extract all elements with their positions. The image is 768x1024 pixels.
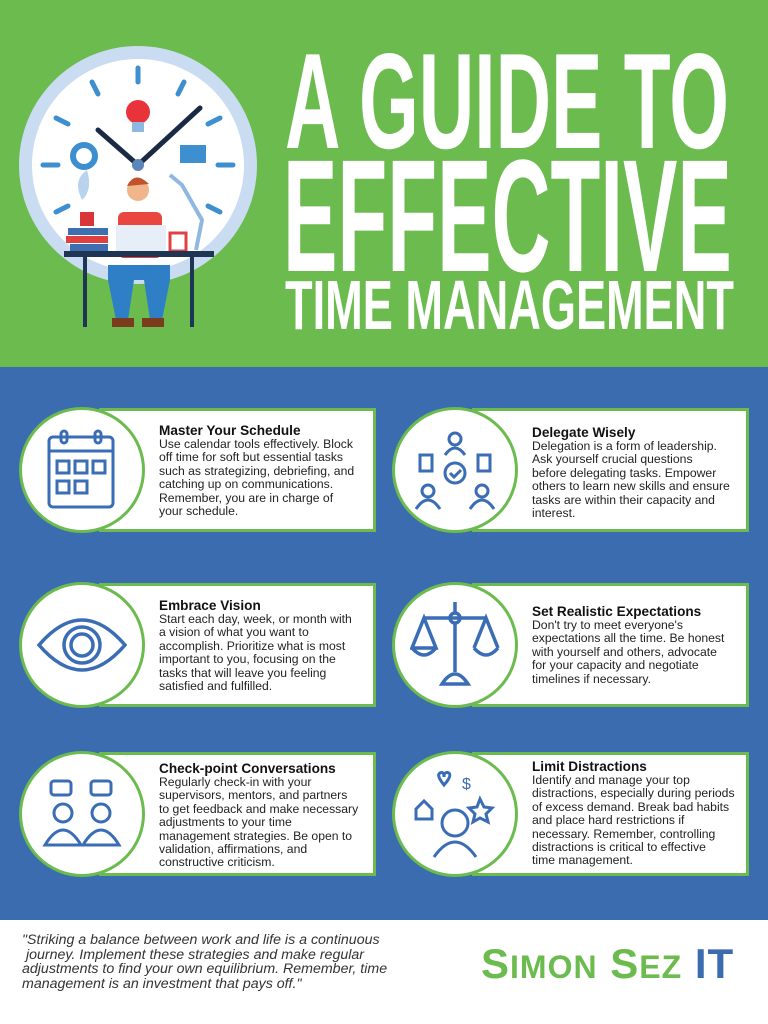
card: Check-point Conversations: Regularly check-in with your xyxy=(159,775,311,789)
card: Limit Distractions xyxy=(392,751,749,877)
card: Set Realistic Expectations: timelines if necessary. xyxy=(532,672,651,686)
card: Set Realistic Expectations: Don't try to meet everyone's xyxy=(532,618,683,632)
card: Check-point Conversations xyxy=(19,751,376,877)
card: Master Your Schedule: Remember, you are in charge of xyxy=(159,491,333,505)
illustration: clock with person at desk xyxy=(19,46,257,327)
card: Limit Distractions: Limit Distractions xyxy=(532,759,647,774)
card: Set Realistic Expectations: for your capacity and negotiate xyxy=(532,658,699,672)
card: Limit Distractions: Identify and manage your top xyxy=(532,773,690,787)
card: Delegate Wisely: interest. xyxy=(532,506,575,520)
card: Limit Distractions: time management. xyxy=(532,853,633,867)
card: Limit Distractions: of excess demand. Break bad habits xyxy=(532,800,729,814)
logo: SIMON SEZ IT xyxy=(481,940,734,987)
card: Check-point Conversations: management strategies. Be open to xyxy=(159,829,352,843)
card: Master Your Schedule: Use calendar tools effectively. Block xyxy=(159,437,353,451)
footer quote xyxy=(22,932,387,992)
card: Limit Distractions: distractions is critical to effective xyxy=(532,840,706,854)
blue section xyxy=(0,367,768,920)
card: Master Your Schedule: Master Your Schedule xyxy=(159,423,301,438)
card: Limit Distractions: distractions, especially during periods xyxy=(532,786,735,800)
icon: distracted person xyxy=(414,771,496,858)
card: Master Your Schedule: off time for soft but essential tasks xyxy=(159,450,343,464)
card: Check-point Conversations: constructive criticism. xyxy=(159,855,275,869)
card: Master Your Schedule: your schedule. xyxy=(159,504,238,518)
card: Embrace Vision: tasks that will leave you feeling xyxy=(159,666,326,680)
icon: delegation xyxy=(414,432,496,510)
icon: two people talking xyxy=(42,780,122,846)
text: A GUIDE TO xyxy=(285,25,729,177)
card: Limit Distractions: and place hard restrictions if xyxy=(532,813,684,827)
footer quote: journey. Implement these strategies and make regular xyxy=(26,947,364,963)
card: Delegate Wisely: Ask yourself crucial questions xyxy=(532,452,693,466)
icon: scales xyxy=(410,602,500,686)
text: TIME MANAGEMENT xyxy=(285,266,734,344)
footer quote: "Striking a balance between work and life is a continuous xyxy=(22,932,380,948)
footer quote: adjustments to find your own equilibrium. Remember, time xyxy=(22,961,387,977)
icon: eye xyxy=(37,618,127,672)
card: Embrace Vision xyxy=(19,582,376,708)
card: Set Realistic Expectations: Set Realistic Expectations xyxy=(532,604,701,619)
card: Check-point Conversations: to get feedback and make necessary xyxy=(159,802,358,816)
card: Set Realistic Expectations xyxy=(392,582,749,708)
card: Master Your Schedule: such as strategizing, debriefing, and xyxy=(159,464,354,478)
icon: distracted person: $ xyxy=(462,776,471,793)
card: Embrace Vision: important to you, focusing on the xyxy=(159,652,336,666)
card: Embrace Vision: a vision of what you want to xyxy=(159,625,309,639)
icon: calendar xyxy=(48,430,114,508)
card: Delegate Wisely: Delegation is a form of leadership. xyxy=(532,439,717,453)
card: Check-point Conversations: validation, affirmations, and xyxy=(159,842,307,856)
card: Delegate Wisely: tasks are within their capacity and xyxy=(532,493,715,507)
card: Embrace Vision: satisfied and fulfilled. xyxy=(159,679,272,693)
title xyxy=(283,25,734,344)
card: Master Your Schedule xyxy=(19,407,376,533)
text: EFFECTIVE xyxy=(283,126,732,305)
card: Delegate Wisely xyxy=(392,407,749,533)
card: Check-point Conversations: Check-point Conversations xyxy=(159,761,336,776)
card: Check-point Conversations: supervisors, mentors, and partners xyxy=(159,788,347,802)
card: Embrace Vision: Start each day, week, or month with xyxy=(159,612,352,626)
card: Embrace Vision: accomplish. Prioritize what is most xyxy=(159,639,345,653)
header background xyxy=(0,0,768,367)
card: Set Realistic Expectations: with yourself and others, advocate xyxy=(532,645,717,659)
card: Set Realistic Expectations: expectations all the time. Be honest xyxy=(532,631,724,645)
card: Delegate Wisely: others to learn new skills and ensure xyxy=(532,479,730,493)
card: Master Your Schedule: catching up on communications. xyxy=(159,477,333,491)
footer quote: management is an investment that pays off." xyxy=(22,976,301,992)
card: Check-point Conversations: adjustments to your time xyxy=(159,815,292,829)
card: Limit Distractions: necessary. Remember, controlling xyxy=(532,827,715,841)
card: Embrace Vision: Embrace Vision xyxy=(159,598,261,613)
card: Delegate Wisely: Delegate Wisely xyxy=(532,425,635,440)
card: Delegate Wisely: before delegating tasks. Empower xyxy=(532,466,716,480)
